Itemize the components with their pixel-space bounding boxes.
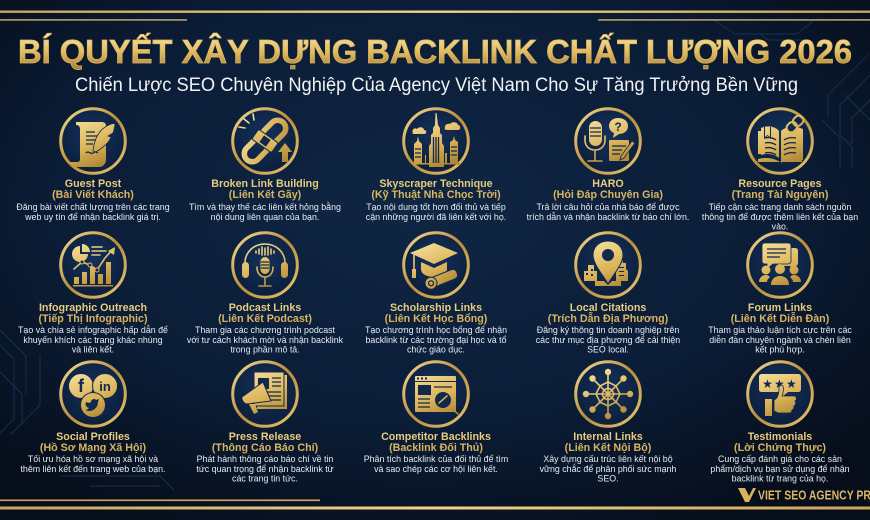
heading: scholarship links: (Liên Kết Học Bổng) (385, 313, 488, 325)
description: forum links: diễn đàn chuyên ngành và chèn liên (709, 335, 851, 345)
icon: scroll and quill (61, 109, 125, 173)
icon: social coins: f (78, 376, 85, 396)
description: press release: các trang tin tức. (232, 474, 298, 484)
heading: competitor backlinks: (Backlink Đối Thủ) (389, 442, 483, 454)
description: local citations: các thư mục địa phương để cải thiện (536, 335, 680, 345)
bottom short rule (0, 500, 320, 501)
icon: newspaper and megaphone (233, 362, 297, 426)
icon: browser and magnifier (404, 362, 468, 426)
heading: broken link building: (Liên Kết Gãy) (229, 189, 302, 201)
heading: resource pages: Resource Pages (738, 178, 822, 190)
description: testimonials: Cung cấp đánh giá cho các sản (718, 454, 842, 464)
card: skyscraper technique (366, 109, 506, 222)
card: guest post (16, 109, 170, 222)
description: internal links: vững chắc để phân phối sức mạnh (540, 464, 676, 474)
heading: skyscraper technique: Skyscraper Technique (379, 178, 493, 190)
description: testimonials: backlink từ trang của họ. (732, 474, 828, 484)
description: resource pages: vào. (772, 222, 788, 232)
description: local citations: SEO local. (587, 344, 629, 354)
card: internal links (540, 362, 676, 484)
description: scholarship links: chức giáo dục. (407, 344, 465, 354)
icon: star rating and thumbs up: ★★★ (762, 377, 798, 391)
heading: guest post: Guest Post (65, 178, 122, 190)
heading: local citations: (Trích Dẫn Địa Phương) (548, 312, 669, 325)
description: guest post: Đăng bài viết chất lượng trên các trang (16, 202, 170, 212)
card: social profiles (20, 362, 166, 474)
description: infographic outreach: Tạo và chia sẻ infographic hấp dẫn để (18, 325, 168, 335)
heading: infographic outreach: Infographic Outreach (39, 302, 147, 314)
icon: microphone and notepad (576, 109, 640, 173)
icon: chart (61, 233, 125, 297)
top left short rule (0, 19, 187, 21)
heading: competitor backlinks: Competitor Backlinks (381, 431, 491, 443)
description: broken link building: Tìm và thay thế các liên kết hỏng bằng (189, 202, 341, 212)
description: scholarship links: Tạo chương trình học bổng để nhận (365, 325, 507, 335)
description: skyscraper technique: cận những người đã liên kết với họ. (366, 212, 506, 222)
description: forum links: Tham gia thảo luận tích cực trên các (708, 325, 852, 335)
subtitle: Chiến Lược SEO Chuyên Nghiệp Của Agency Việt Nam Cho Sự Tăng Trưởng Bền Vững (75, 75, 798, 96)
icon: microphone and notepad: ? (614, 120, 622, 134)
bottom gold rule (0, 506, 870, 510)
description: testimonials: phẩm/dịch vụ bạn sử dụng để nhận (710, 464, 850, 474)
heading: social profiles: Social Profiles (56, 431, 130, 443)
heading: haro: HARO (592, 178, 624, 190)
description: resource pages: Tiếp cận các trang danh sách nguồn (709, 202, 851, 212)
card: competitor backlinks (364, 362, 508, 474)
card: resource pages (702, 109, 858, 232)
heading: scholarship links: Scholarship Links (390, 302, 482, 314)
description: haro: trích dẫn và nhận backlink từ báo chí lớn. (527, 212, 689, 222)
icon: web network (576, 362, 640, 426)
heading: internal links: Internal Links (573, 431, 643, 443)
icon: skyscrapers (404, 109, 468, 173)
card: scholarship links (365, 233, 507, 354)
card: testimonials (710, 362, 850, 484)
heading: social profiles: (Hồ Sơ Mạng Xã Hội) (40, 442, 147, 454)
description: resource pages: thông tin để được thêm liên kết của bạn (702, 212, 858, 222)
heading: podcast links: (Liên Kết Podcast) (218, 313, 312, 325)
heading: testimonials: Testimonials (748, 431, 812, 443)
card: podcast links (187, 233, 344, 354)
top right short rule (598, 19, 870, 21)
description: podcast links: Tham gia các chương trình podcast (195, 325, 336, 335)
description: podcast links: trong phần mô tả. (230, 344, 300, 354)
heading: broken link building: Broken Link Building (211, 178, 319, 190)
icon: open book with link (748, 109, 812, 173)
description: social profiles: thêm liên kết đến trang web của bạn. (20, 464, 166, 474)
heading: skyscraper technique: (Kỹ Thuật Nhà Chọc Trời) (371, 189, 501, 201)
description: haro: Trả lời câu hỏi của nhà báo để được (536, 202, 680, 212)
description: competitor backlinks: và sao chép các cơ hội liên kết. (374, 464, 498, 474)
icon: social coins: in (99, 379, 111, 394)
heading: guest post: (Bài Viết Khách) (52, 189, 134, 201)
heading: forum links: Forum Links (748, 302, 812, 314)
icon: broken chain (233, 109, 297, 173)
description: infographic outreach: khuyến khích các trang khác nhúng (23, 335, 163, 345)
icon: V mark (738, 488, 756, 502)
heading: testimonials: (Lời Chứng Thực) (734, 442, 826, 454)
heading: forum links: (Liên Kết Diễn Đàn) (731, 312, 830, 325)
card: press release (196, 362, 334, 484)
description: infographic outreach: và liên kết. (72, 344, 114, 354)
icon: graduation cap and diploma (404, 233, 468, 297)
card: infographic outreach (18, 233, 168, 354)
icon: chat bubbles and people (748, 233, 812, 297)
description: competitor backlinks: Phân tích backlink của đối thủ để tìm (364, 454, 508, 464)
description: guest post: web uy tín để nhận backlink giá trị. (24, 212, 161, 222)
heading: infographic outreach: (Tiếp Thị Infographic) (38, 313, 148, 325)
description: press release: Phát hành thông cáo báo chí về tin (197, 454, 333, 464)
heading: podcast links: Podcast Links (229, 302, 301, 314)
description: social profiles: Tối ưu hóa hồ sơ mạng xã hội và (28, 454, 158, 464)
heading: press release: Press Release (229, 431, 301, 443)
description: broken link building: nội dung liên quan của bạn. (211, 212, 319, 222)
description: internal links: SEO. (597, 474, 619, 484)
heading: press release: (Thông Cáo Báo Chí) (212, 442, 319, 454)
description: skyscraper technique: Tạo nội dung tốt hơn đối thủ và tiếp (366, 202, 506, 212)
icon: social coins (61, 362, 125, 426)
heading: haro: (Hỏi Đáp Chuyên Gia) (553, 189, 663, 201)
card: broken link building (189, 109, 341, 222)
heading: internal links: (Liên Kết Nội Bộ) (565, 442, 652, 454)
icon: map pin and city (576, 233, 640, 297)
logo: viet seo agency (738, 488, 870, 502)
icon: headphones and microphone (233, 233, 297, 297)
card: local citations (536, 233, 680, 354)
heading: resource pages: (Trang Tài Nguyên) (732, 189, 829, 201)
title: BÍ QUYẾT XÂY DỰNG BACKLINK CHẤT LƯỢNG 2026 (18, 33, 852, 70)
description: forum links: kết phù hợp. (755, 344, 805, 354)
description: podcast links: với tư cách khách mời và nhận backlink (187, 335, 344, 345)
description: press release: tức quan trọng để nhận backlink từ (196, 464, 334, 474)
description: internal links: Xây dựng cấu trúc liên kết nội bộ (543, 454, 673, 464)
top gold rule (0, 10, 870, 13)
card: forum links (708, 233, 852, 354)
description: local citations: Đăng ký thông tin doanh nghiệp trên (537, 325, 679, 335)
heading: local citations: Local Citations (570, 302, 646, 314)
card: haro (527, 109, 689, 222)
description: scholarship links: backlink từ các trường đại học và tổ (365, 335, 507, 345)
